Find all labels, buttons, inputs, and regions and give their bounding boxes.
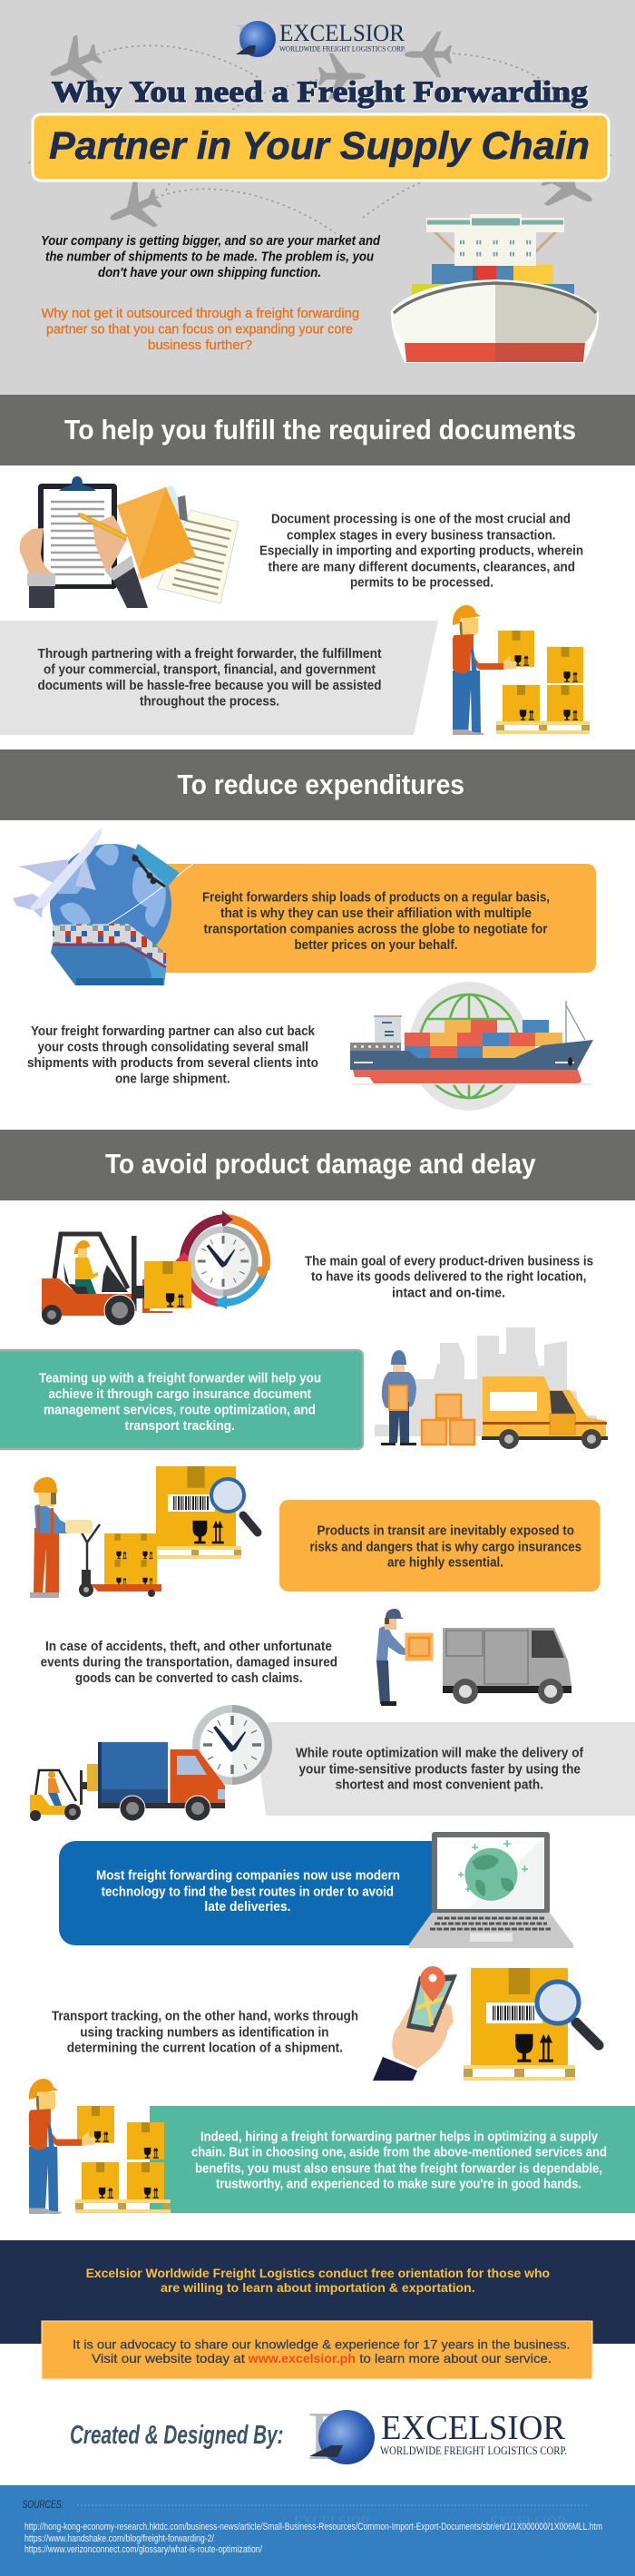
panel: orange advocacy box: to learn more about our service. [359,2351,552,2365]
panel: grey route optimization text: While route optimization will make the delivery of [296,1747,583,1761]
intro text: the number of shipments to be made. The problem is, you [45,250,374,265]
panel: orange freight forwarders text: that is why they can use their affiliation with multiple [220,906,532,921]
panel: orange advocacy box: Visit our website today at [92,2351,245,2365]
text: consolidating shipments: your costs through consolidating several small [38,1040,308,1054]
panel: sources: SOURCES: [22,2498,64,2511]
text: consolidating shipments: shipments with products from several clients into [27,1056,318,1071]
icon: laptop with globe [409,1832,573,1948]
panel: green teaming up text: Teaming up with a freight forwarder will help you [39,1371,321,1386]
intro text: don't have your own shipping function. [98,266,321,280]
title line 1: Why You need a Freight Forwarding [52,76,589,109]
orange question text: business further? [148,338,252,353]
intro text: Your company is getting bigger, and so are your market and [41,234,381,249]
section heading: damage and delay [0,1130,635,1200]
panel: orange advocacy box [42,2321,592,2379]
icon: plane 5 [533,153,604,223]
logo: Excelsior top: E [235,14,262,64]
text: created and designed by: Created & Designed By: [70,2421,283,2450]
section heading: expenditures: To reduce expenditures [178,769,464,800]
text: transport tracking: using tracking numbers as identification in [80,2025,329,2040]
text: document processing: Especially in importing and exporting products, wherein [259,544,583,559]
text: accidents and claims [41,1640,337,1686]
text: document processing [259,513,583,591]
panel: orange freight forwarders text: transportation companies across the globe to negotiate for [203,922,548,936]
dashed flight routes [28,45,612,233]
panel: sources [0,2485,635,2576]
icon: truck, forklift and clock [30,1705,272,1821]
text: main goal: to have its goods delivered to the right location, [311,1270,586,1285]
panel: green teaming up text: transport tracking. [125,1419,235,1434]
icon: plane 3 [405,32,452,77]
panel: partnering text: Through partnering with a freight forwarder, the fulfillment [38,647,382,661]
icon: worker with boxes on pallet [29,2079,171,2214]
text: accidents and claims: goods can be converted to cash claims. [75,1671,303,1686]
panel: green teaming up text: management services, route optimization, and [44,1403,316,1417]
panel: orange advocacy box: www.excelsior.ph [248,2351,356,2365]
panel: partnering text: documents will be hassle-free because you will be assisted [38,679,381,693]
orange question text [42,307,359,353]
text: transport tracking: determining the current location of a shipment. [67,2042,343,2056]
panel: grey route optimization text: shortest and most convenient path. [336,1778,543,1793]
title banner: Partner in Your Supply Chain [49,124,590,168]
icon: hand holding phone with map pin [373,1966,457,2081]
orange question text: partner so that you can focus on expanding your core [46,323,353,338]
panel: sources: https://www.verizonconnect.com/glossary/what-is-route-optimization/ [24,2544,263,2555]
panel: green conclusion text: Indeed, hiring a freight forwarding partner helps in optimizing a supply [200,2130,599,2144]
panel: navy orientation band: Excelsior Worldwide Freight Logistics conduct free orientation for those who [86,2266,550,2280]
icon: forklift with box and clock [42,1210,270,1326]
text: accidents and claims: In case of accidents, theft, and other unfortunate [45,1640,332,1654]
text: document processing: permits to be processed. [350,576,493,591]
panel: navy orientation band [0,2240,635,2344]
panel: navy orientation band: are willing to learn about importation & exportation. [161,2280,475,2295]
panel: orange cargo insurance text: are highly essential. [387,1556,503,1571]
panel: sources: EXCELSIOR [294,2514,370,2530]
text: consolidating shipments: Your freight forwarding partner can also cut back [31,1024,316,1039]
text: transport tracking: Transport tracking, on the other hand, works through [52,2010,358,2024]
panel: blue technology text: technology to find the best routes in order to avoid [102,1885,394,1899]
orange question text: Why not get it outsourced through a freight forwarding [42,307,359,321]
section heading: documents [0,395,635,465]
icon: plane 4 [100,174,169,242]
text: document processing: Document processing is one of the most crucial and [271,513,571,527]
text: main goal: intact and on-time. [392,1286,505,1300]
icon: globe with plane, truck and ship [13,828,193,985]
logo: Excelsior top: WORLDWIDE FREIGHT LOGISTICS CORP. [279,45,405,53]
intro text [41,234,381,280]
panel: green conclusion text: trustworthy, and experienced to make sure you're in good hands. [216,2178,581,2192]
title banner [33,114,609,181]
icon: clipboard, folder and hands [20,476,239,608]
panel: orange cargo insurance text: Products in transit are inevitably exposed to [318,1524,574,1539]
text: transport tracking [52,2010,358,2056]
icon: box with barcode and magnifier [464,1968,599,2081]
icon: cargo ship with green globe [350,982,593,1111]
panel: partnering text [0,621,438,735]
icon: container ship front view [391,214,599,363]
header background [0,0,635,396]
panel: orange cargo insurance text: risks and dangers that is why cargo insurances [310,1540,581,1554]
section heading: expenditures [0,749,635,820]
icon: plane 2 [318,54,366,99]
panel: partnering text: throughout the process. [140,694,279,709]
icon: courier, boxes and yellow van with city [375,1327,608,1449]
panel: sources: https://www.handshake.com/blog/freight-forwarding-2/ [24,2533,215,2544]
panel: grey route optimization text: your time-sensitive products faster by using the [299,1762,581,1777]
section heading: damage and delay: To avoid product damage and delay [105,1148,536,1180]
icon: worker with boxes [453,605,590,735]
icon: plane 1 [40,30,109,98]
logo: Excelsior top [235,14,405,64]
panel: partnering text: of your commercial, transport, financial, and government [44,662,376,677]
panel: green teaming up text [0,1350,363,1449]
text: document processing: complex stages in every business transaction. [287,528,555,543]
panel: orange advocacy box: It is our advocacy to share our knowledge & experience for 17 years in the business. [73,2336,571,2351]
text: main goal: The main goal of every product-driven business is [305,1254,593,1268]
panel: orange freight forwarders text: Freight forwarders ship loads of products on a regular basis, [202,890,550,905]
text: consolidating shipments [27,1024,318,1086]
icon: courier with grey van [376,1609,572,1706]
section heading: documents: To help you fulfill the required documents [64,414,576,446]
logo: Excelsior top: EXCELSIOR [279,20,405,46]
text: document processing: there are many different documents, clearances, and [269,560,575,574]
logo: Excelsior bottom: E [308,2398,353,2474]
panel: green conclusion text: benefits, you must also ensure that the freight forwarder is dependable, [195,2161,602,2176]
logo: Excelsior bottom [308,2398,567,2474]
text: main goal [305,1254,593,1300]
text: consolidating shipments: one large shipment. [115,1072,230,1086]
logo: Excelsior bottom: WORLDWIDE FREIGHT LOGISTICS CORP. [380,2444,567,2457]
panel: grey route optimization text [260,1722,635,1816]
logo: Excelsior bottom: EXCELSIOR [381,2409,566,2447]
panel: green conclusion text [150,2106,635,2213]
panel: orange freight forwarders text: better prices on your behalf. [294,938,457,953]
panel: blue technology text: Most freight forwarding companies now use modern [96,1869,400,1884]
panel: orange freight forwarders text [154,864,596,973]
panel: blue technology text [59,1841,454,1945]
panel: sources: EXCELSIOR [490,2514,566,2530]
icon: worker with pallet jack and inspected box [30,1466,258,1598]
panel: green teaming up text: achieve it through cargo insurance document [49,1387,311,1402]
panel: blue technology text: late deliveries. [204,1900,290,1915]
panel: orange cargo insurance text [279,1500,601,1592]
text: accidents and claims: events during the transportation, damaged insured [41,1656,337,1670]
